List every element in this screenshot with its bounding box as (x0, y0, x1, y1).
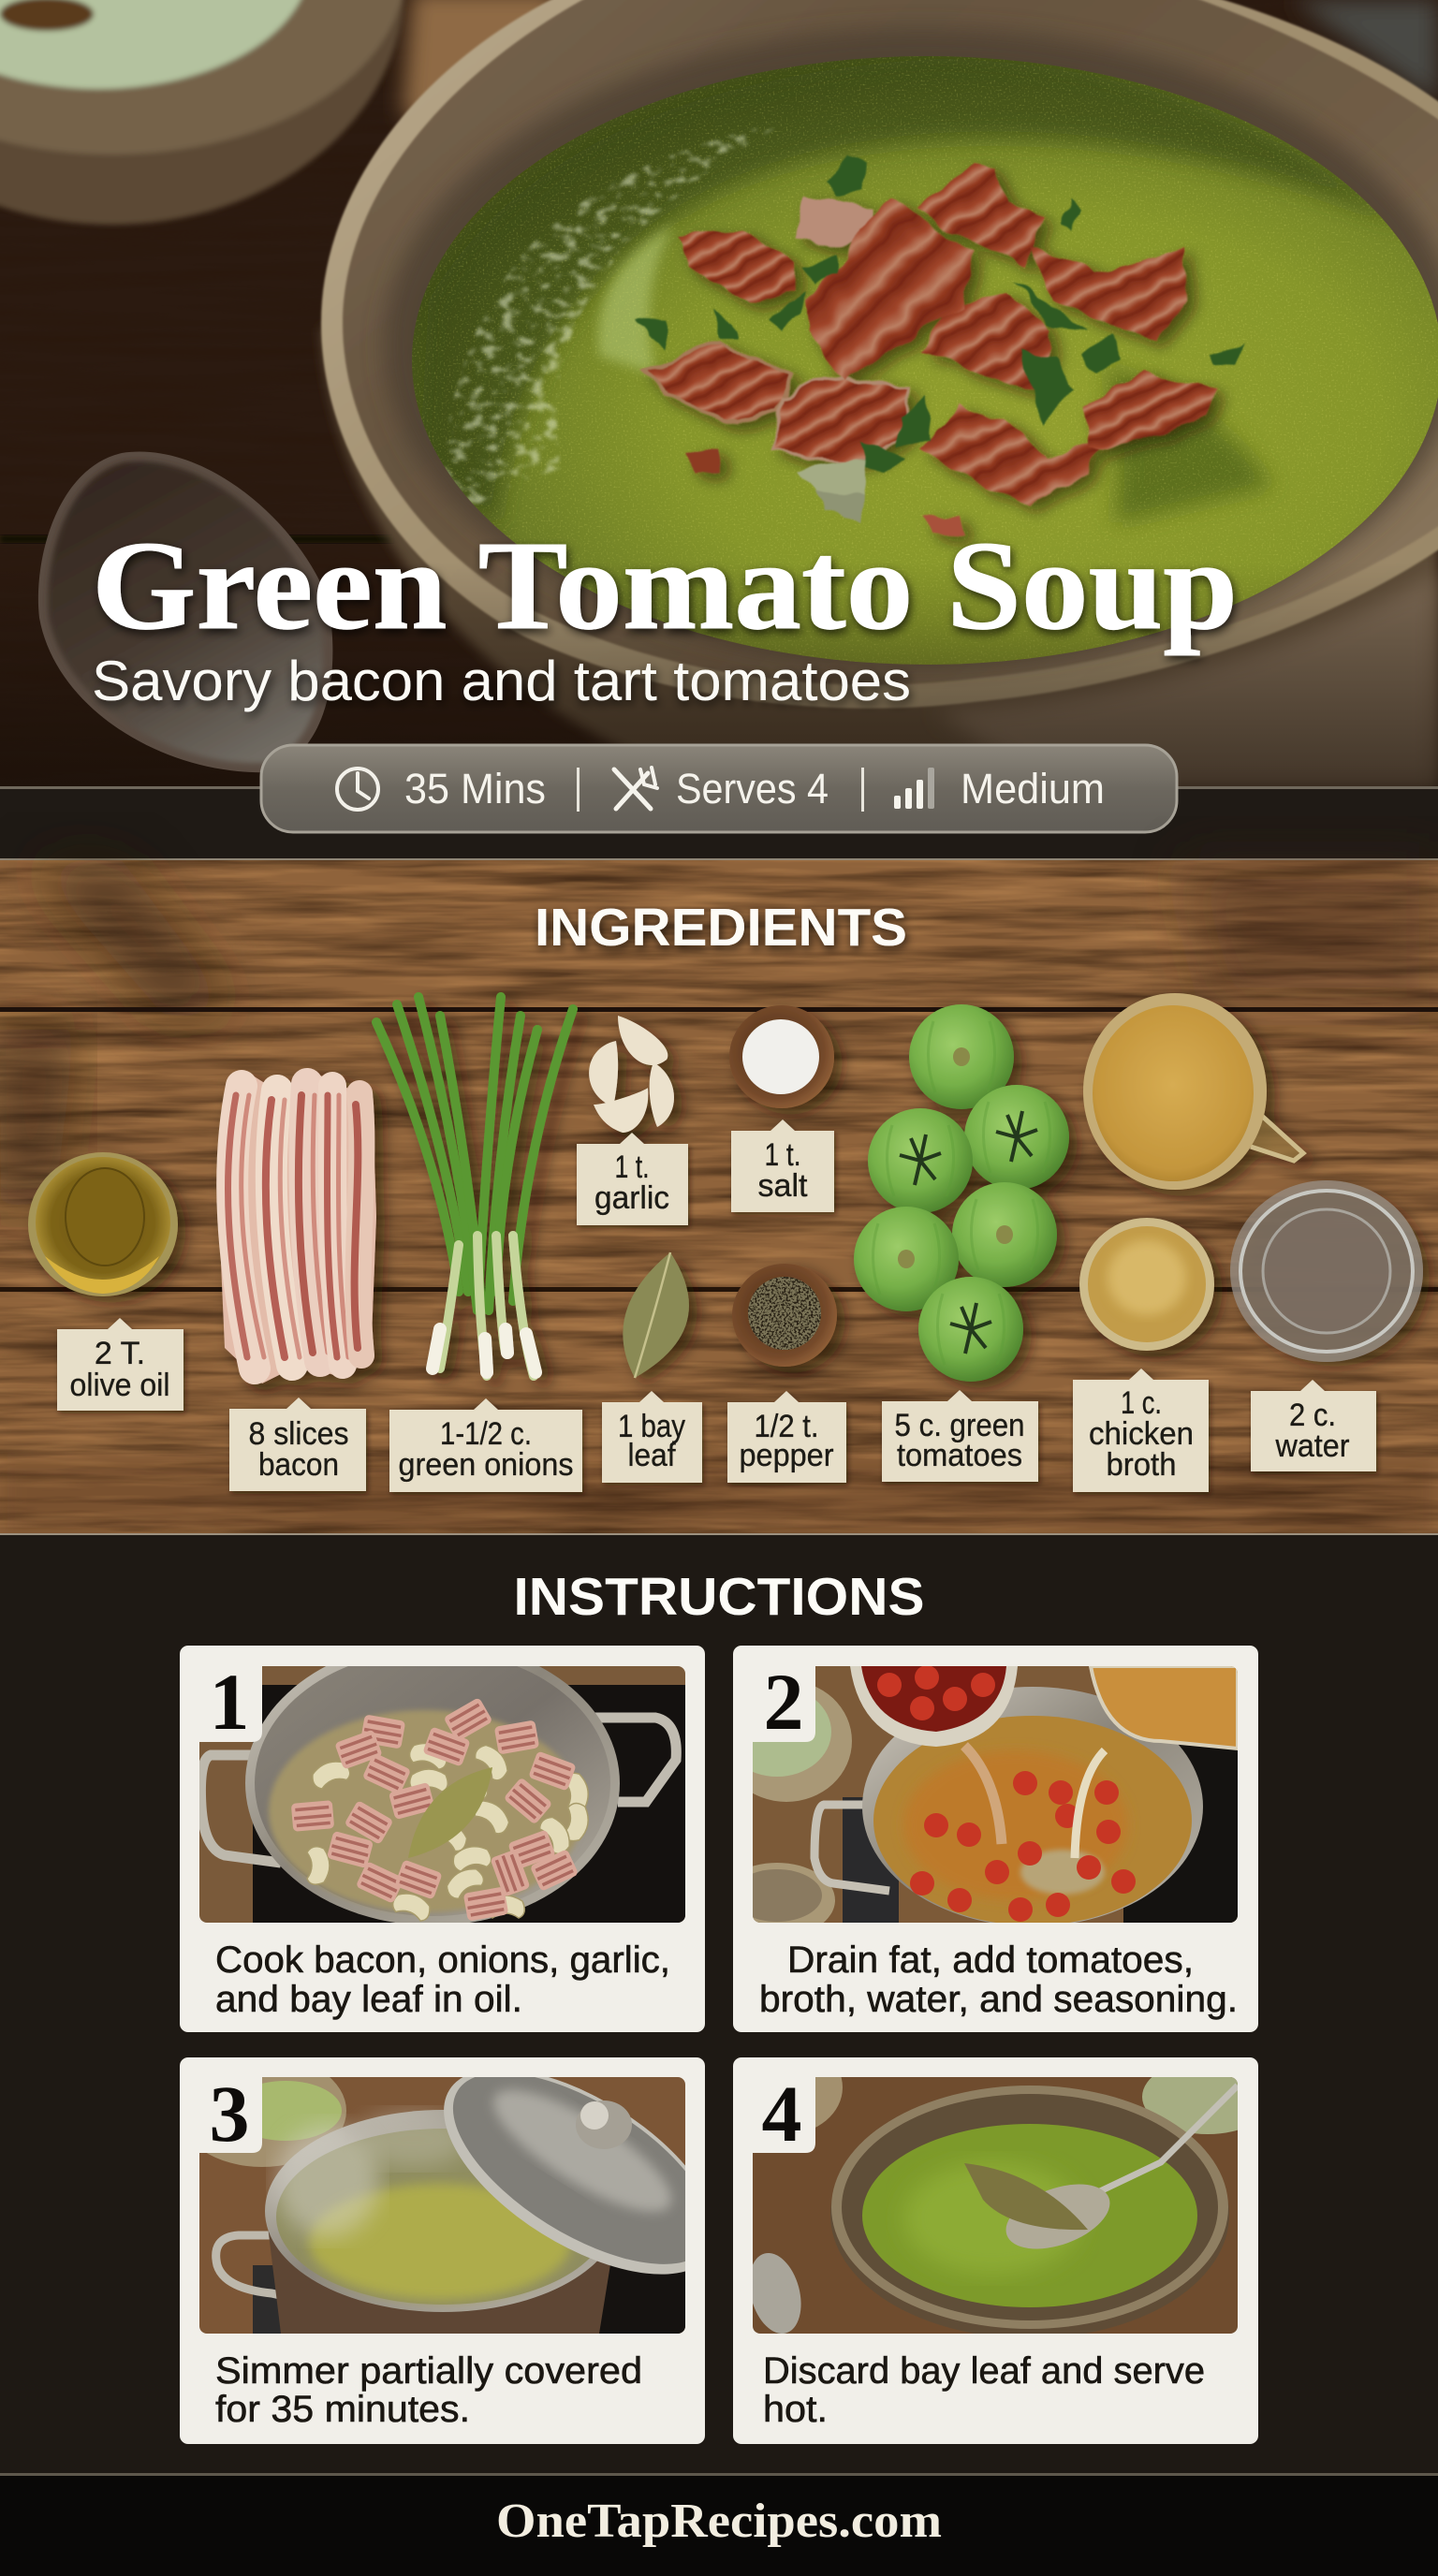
footer (0, 2473, 1438, 2576)
step number 1 (199, 1657, 262, 1747)
label: garlic (577, 1133, 688, 1225)
step 1 text: and bay leaf in oil. (215, 1979, 522, 2020)
icon: fork and knife (614, 768, 657, 809)
label: green onions: green onions (399, 1447, 573, 1483)
dark band under hero (0, 786, 1438, 860)
heading: instructions: INSTRUCTIONS (513, 1567, 925, 1627)
step 3 text: for 35 minutes. (215, 2389, 470, 2430)
label: olive oil: 2 T. (95, 1336, 145, 1371)
label: bay leaf: leaf (627, 1438, 676, 1473)
step 4 text (763, 2350, 1205, 2430)
label: chicken broth: broth (1107, 1447, 1176, 1483)
label: green tomatoes (882, 1390, 1038, 1482)
step 1 photo (199, 1641, 685, 1925)
label: bacon (229, 1398, 366, 1491)
label: garlic: 1 t. (614, 1149, 650, 1185)
icon: clock (337, 768, 378, 810)
label: green onions (389, 1398, 582, 1492)
step 3 text (215, 2350, 642, 2430)
difficulty: Medium (961, 765, 1105, 812)
label: water: 2 c. (1289, 1398, 1336, 1433)
ingredient: green onions (376, 997, 573, 1376)
footer: OneTapRecipes.com (496, 2495, 942, 2548)
cook time: 35 Mins (404, 765, 546, 812)
main bowl (0, 0, 1438, 788)
label: bacon: 8 slices (249, 1416, 348, 1452)
ingredient: salt (729, 1005, 834, 1108)
step 1 text (215, 1939, 670, 2020)
step card 1 (180, 1641, 705, 2032)
step number 2: 2 (764, 1657, 803, 1747)
label: bacon: bacon (258, 1447, 339, 1483)
step 2 text: broth, water, and seasoning. (759, 1979, 1238, 2020)
step number 1: 1 (210, 1657, 249, 1747)
background bowl (0, 0, 404, 225)
ingredient: olive oil (28, 1152, 178, 1296)
label: water: water (1275, 1428, 1350, 1464)
step card 3 (180, 2057, 705, 2444)
bacon garnish (646, 164, 1217, 535)
instructions panel (180, 1578, 1258, 2444)
label: green onions: 1-1/2 c. (440, 1416, 532, 1452)
step 4 text: hot. (763, 2389, 828, 2430)
ingredient: bay leaf (623, 1252, 689, 1378)
step 2 photo (753, 1666, 1238, 1923)
label: salt (731, 1120, 834, 1212)
step card 2 (719, 1646, 1258, 2032)
step 2 text: Drain fat, add tomatoes, (787, 1939, 1194, 1981)
step 2 text (759, 1939, 1238, 2020)
label: garlic: garlic (594, 1180, 669, 1216)
heading: ingredients: INGREDIENTS (535, 898, 907, 958)
step card 4 (730, 2041, 1273, 2444)
servings: Serves 4 (676, 765, 829, 812)
step number 4 (753, 2069, 815, 2159)
step 4 photo (730, 2041, 1273, 2339)
label: chicken broth: 1 c. (1121, 1385, 1162, 1421)
ingredient: pepper (732, 1264, 837, 1367)
step 4 text: Discard bay leaf and serve (763, 2350, 1205, 2392)
step number 2 (753, 1657, 815, 1747)
label: salt: salt (758, 1168, 808, 1204)
spoon (38, 452, 332, 772)
label: pepper (727, 1391, 846, 1483)
label: bay leaf: 1 bay (618, 1409, 685, 1444)
label: olive oil (57, 1318, 183, 1411)
ingredient: water (1230, 1180, 1423, 1362)
label: salt: 1 t. (764, 1137, 801, 1173)
step 3 photo (199, 2077, 685, 2334)
step number 3: 3 (210, 2069, 249, 2159)
subtitle: Savory bacon and tart tomatoes (92, 650, 911, 712)
label: chicken broth (1073, 1368, 1209, 1492)
soup surface (412, 51, 1438, 665)
hero section: soup photo (0, 0, 1438, 788)
label: green tomatoes: tomatoes (897, 1438, 1022, 1473)
label: green tomatoes: 5 c. green (895, 1408, 1024, 1443)
ingredient: green tomatoes (854, 1004, 1069, 1382)
ingredient: chicken broth jug (1083, 993, 1303, 1190)
label: bay leaf (602, 1391, 702, 1483)
herb garnish (637, 154, 1245, 524)
ingredient: bacon (218, 1071, 376, 1383)
step 1 text: Cook bacon, onions, garlic, (215, 1939, 670, 1981)
step number 4: 4 (762, 2069, 801, 2159)
title: Green Tomato Soup (92, 516, 1238, 656)
label: olive oil: olive oil (69, 1368, 170, 1403)
ingredient: garlic (589, 1016, 674, 1133)
info pill (261, 745, 1177, 832)
label: pepper: 1/2 t. (755, 1409, 818, 1444)
ingredients panel (0, 860, 1438, 1535)
label: chicken broth: chicken (1089, 1416, 1194, 1452)
ingredient: small broth (1079, 1218, 1214, 1351)
icon: difficulty bars (894, 768, 934, 809)
step number 3 (199, 2069, 262, 2159)
label: pepper: pepper (740, 1438, 833, 1473)
step 3 text: Simmer partially covered (215, 2350, 642, 2392)
label: water (1251, 1380, 1376, 1471)
